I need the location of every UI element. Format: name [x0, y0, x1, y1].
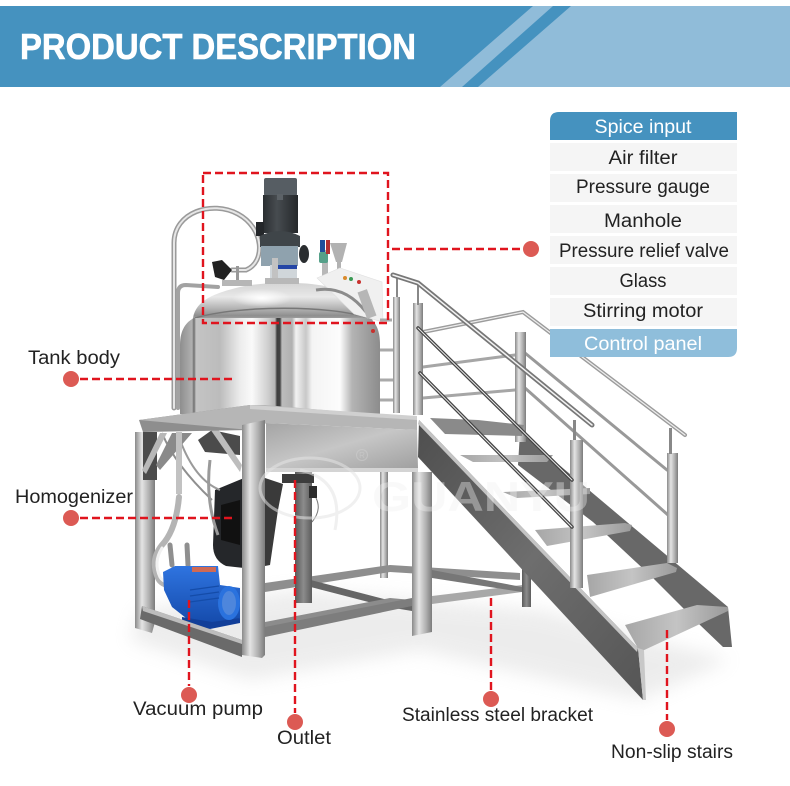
- callout: non-slip stairs: Non-slip stairs: [611, 742, 733, 763]
- callout: outlet: Outlet: [277, 728, 332, 749]
- stirring motor: [256, 178, 309, 284]
- row: manhole: [550, 205, 737, 233]
- rear stair rails behind: [423, 312, 685, 515]
- callout: outlet: [277, 480, 332, 749]
- callout: vacuum pump: Vacuum pump: [133, 699, 263, 720]
- row: spice input: [550, 112, 737, 140]
- header banner: [0, 6, 790, 87]
- row: pressure relief valve: Pressure relief valve: [559, 241, 729, 262]
- rear frame: [265, 468, 531, 632]
- tank dome: [190, 283, 375, 330]
- vacuum pump hoses: [155, 497, 195, 585]
- row: pressure relief valve: [550, 236, 737, 264]
- callout: tank body: [28, 348, 232, 387]
- floor shadow: [130, 590, 730, 700]
- row: stirring motor: Stirring motor: [583, 301, 704, 322]
- stair treads: [430, 418, 728, 652]
- control panel box: [316, 268, 383, 333]
- front stair post and rails: [393, 275, 592, 588]
- machine illustration: mixing tank on platform with stairs: [130, 178, 732, 700]
- callout: vacuum pump: [133, 600, 263, 720]
- row: control panel: Control panel: [584, 334, 702, 355]
- watermark logo: [260, 450, 590, 530]
- top fittings: gauge, valve, funnel: [212, 240, 347, 286]
- homogenizer: [162, 430, 283, 568]
- row: spice input: Spice input: [594, 117, 692, 138]
- row: manhole: Manhole: [604, 211, 682, 232]
- callout: stainless steel bracket: Stainless steel bracket: [402, 705, 594, 726]
- title: PRODUCT DESCRIPTION: [20, 26, 416, 67]
- callout: non-slip stairs: [611, 630, 733, 763]
- pipe left and circular pipe: [174, 208, 259, 408]
- row: stirring motor: [550, 298, 737, 326]
- row: pressure gauge: Pressure gauge: [576, 177, 710, 198]
- watermark logo: GUANYU: [372, 473, 590, 520]
- outlet valve: [282, 474, 318, 522]
- callout: stainless steel bracket: [402, 598, 594, 726]
- vacuum pump: [163, 566, 240, 629]
- row: pressure gauge: [550, 174, 737, 202]
- front stair stringer: [418, 420, 646, 700]
- row: air filter: Air filter: [608, 148, 678, 169]
- panel: component list: [550, 112, 737, 357]
- left frame leg, apron and braces: [135, 426, 242, 633]
- lower frame: [140, 598, 412, 657]
- table top and apron: [139, 405, 432, 658]
- row: air filter: [550, 143, 737, 171]
- watermark logo: R: [359, 451, 365, 460]
- tank body: [180, 318, 380, 414]
- row: glass: [550, 267, 737, 295]
- row: glass: Glass: [620, 271, 666, 292]
- row: control panel: [550, 329, 737, 357]
- callout: homogenizer: [15, 487, 232, 526]
- callout: homogenizer: Homogenizer: [15, 487, 134, 508]
- callout: tank body: Tank body: [28, 348, 121, 369]
- callout: top assembly dashed box: [203, 173, 539, 323]
- rear stair stringer and posts: [380, 277, 732, 647]
